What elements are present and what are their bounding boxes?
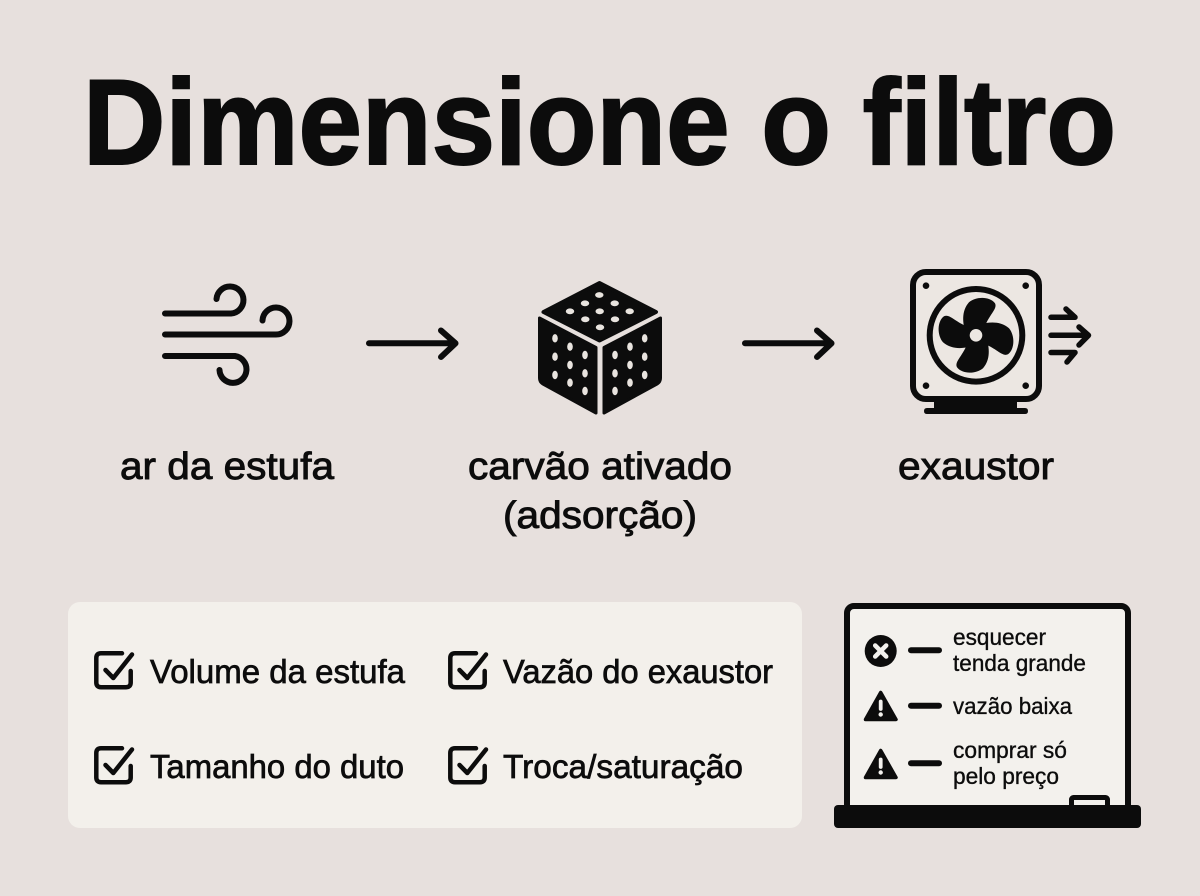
item: Troca/saturação: Troca/saturação [503, 748, 743, 785]
mistake: vazão baixa [866, 692, 1072, 720]
label: ar da estufa: ar da estufa [120, 446, 335, 488]
arrow: air to carbon [369, 330, 456, 357]
panel: whiteboard of common mistakes [834, 606, 1141, 828]
mistake: comprar só pelo preço: comprar só [953, 737, 1067, 763]
label: carvão ativado (adsorção): carvão ativado [468, 446, 732, 488]
flow diagram [120, 272, 1088, 537]
icon: activated carbon cube [540, 283, 660, 413]
item: Tamanho do duto: Tamanho do duto [150, 748, 404, 785]
title: Dimensione o filtro [83, 54, 1116, 190]
icon: exhaust fan [913, 272, 1088, 414]
item: Vazão do exaustor: Vazão do exaustor [503, 653, 773, 690]
label: carvão ativado (adsorção) [468, 446, 732, 537]
mistake: esquecer tenda grande: esquecer [953, 624, 1046, 650]
icon: wind [165, 287, 289, 383]
panel: checklist [68, 602, 802, 828]
arrow: carbon to fan [745, 330, 832, 357]
mistake: comprar só pelo preço [866, 737, 1067, 789]
mistake: vazão baixa: vazão baixa [953, 693, 1072, 719]
mistake: comprar só pelo preço: pelo preço [953, 763, 1059, 789]
item: Volume da estufa: Volume da estufa [150, 653, 406, 690]
label: exaustor: exaustor [898, 446, 1054, 488]
mistake: esquecer tenda grande [865, 624, 1086, 676]
label: carvão ativado (adsorção): (adsorção) [503, 495, 697, 537]
mistake: esquecer tenda grande: tenda grande [953, 650, 1086, 676]
